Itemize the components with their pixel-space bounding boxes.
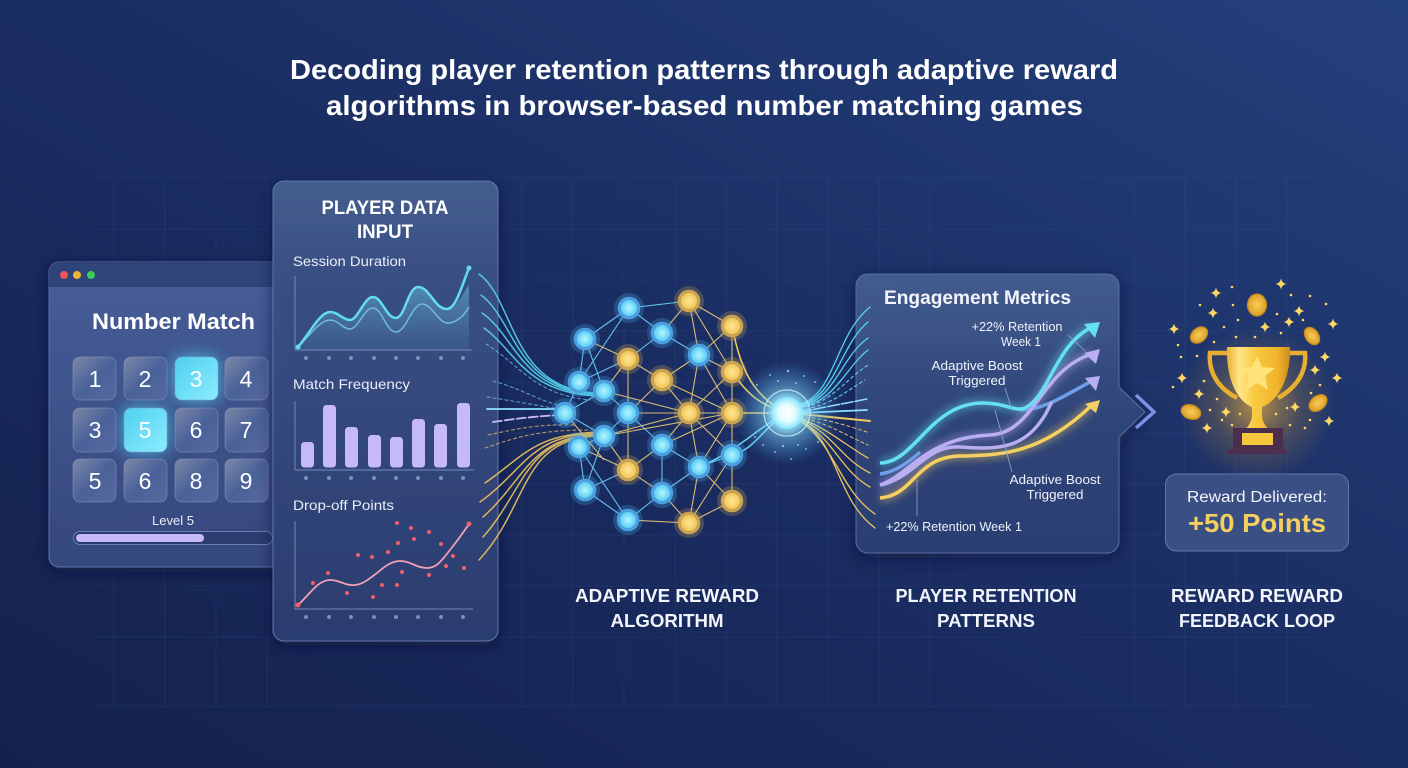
- game heading: Number Match: [92, 309, 255, 334]
- number tile grid: 8: [190, 468, 202, 494]
- title: [290, 54, 1118, 121]
- label: reward feedback loop: REWARD REWARD: [1171, 585, 1343, 606]
- panel: player data input: [273, 181, 498, 641]
- arrowheads: [1084, 322, 1100, 413]
- coins: [1179, 294, 1330, 422]
- chart: match frequency: [293, 376, 474, 480]
- trophy handles: [1210, 353, 1305, 398]
- level progress bar: [74, 532, 272, 544]
- annotation: retention week 1 bottom: +22% Retention Week 1: [886, 520, 1022, 534]
- retention curves: [880, 327, 1092, 498]
- number tile grid: [73, 357, 268, 502]
- label: reward feedback loop: [1171, 585, 1343, 631]
- label: adaptive reward algorithm: ADAPTIVE REWARD: [575, 585, 759, 606]
- chart: match frequency: Match Frequency: [293, 376, 410, 392]
- annotation: adaptive boost lower: Adaptive Boost: [1010, 473, 1101, 487]
- label: adaptive reward algorithm: ALGORITHM: [610, 610, 724, 631]
- icon: trophy with coins and sparkles: [1168, 278, 1342, 483]
- background grid: [92, 178, 1316, 708]
- title: Decoding player retention patterns through adaptive reward: [290, 54, 1118, 85]
- title: algorithms in browser-based number matching games: [326, 90, 1083, 121]
- number tile grid: 5: [89, 468, 101, 494]
- label: player retention patterns: PLAYER RETENTION: [896, 585, 1076, 606]
- number tile grid: 9: [240, 468, 252, 494]
- trophy cup: [1227, 347, 1290, 429]
- panel heading: [322, 198, 449, 243]
- number tile grid: 3: [190, 366, 202, 392]
- neural network: adaptive reward algorithm: [550, 286, 787, 538]
- level label: Level 5: [152, 513, 194, 528]
- number tile grid: 1: [89, 366, 101, 392]
- annotation: adaptive boost lower: Triggered: [1026, 488, 1084, 502]
- network edges: [565, 301, 787, 523]
- retention curves glow: [880, 327, 1092, 498]
- annotation: retention week 1 top: [972, 320, 1063, 349]
- callout: reward delivered: +50 Points: [1188, 508, 1326, 538]
- annotation: adaptive boost lower: [1010, 473, 1101, 502]
- trophy star: [1239, 356, 1275, 390]
- data streams: input to network: [479, 274, 600, 560]
- arrow: chevron to reward: [1136, 395, 1154, 428]
- number tile grid: 7: [240, 417, 252, 443]
- callout: reward delivered: Reward Delivered:: [1187, 489, 1327, 506]
- panel: engagement metrics: [856, 274, 1145, 553]
- number tile grid: 3: [89, 417, 101, 443]
- data streams: hub to metrics: [800, 307, 875, 528]
- number tile grid: 6: [139, 468, 151, 494]
- chart: drop-off points: Drop-off Points: [293, 497, 394, 513]
- annotation: retention week 1 top: Week 1: [1001, 335, 1041, 349]
- label: reward feedback loop: FEEDBACK LOOP: [1179, 610, 1335, 631]
- number tile grid: 6: [190, 417, 202, 443]
- number tile grid: 2: [139, 366, 151, 392]
- annotation: retention week 1 top: +22% Retention: [972, 320, 1063, 334]
- label: player retention patterns: PATTERNS: [937, 610, 1035, 631]
- annotation: adaptive boost upper: Triggered: [948, 374, 1006, 388]
- panel heading: INPUT: [357, 222, 413, 243]
- trophy base: [1228, 428, 1287, 454]
- chart: session duration: Session Duration: [293, 253, 406, 269]
- number tile grid: 5: [139, 417, 151, 443]
- chart: drop-off points: [293, 497, 473, 619]
- network nodes: [550, 286, 747, 538]
- window title bar: [49, 262, 289, 287]
- panel heading: PLAYER DATA: [322, 198, 449, 219]
- number tile grid: 4: [240, 366, 253, 392]
- callout: reward delivered: [1166, 474, 1348, 551]
- annotation: adaptive boost upper: [932, 359, 1023, 388]
- annotation: adaptive boost upper: Adaptive Boost: [932, 359, 1023, 373]
- label: adaptive reward algorithm: [575, 585, 759, 631]
- chart: session duration: [293, 253, 472, 360]
- annotation leader lines: [917, 335, 1085, 516]
- central glowing hub: [735, 361, 839, 465]
- panel: number match game window: [49, 262, 289, 567]
- label: player retention patterns: [896, 585, 1076, 631]
- panel heading: Engagement Metrics: [884, 288, 1071, 309]
- sparkles: [1168, 278, 1342, 434]
